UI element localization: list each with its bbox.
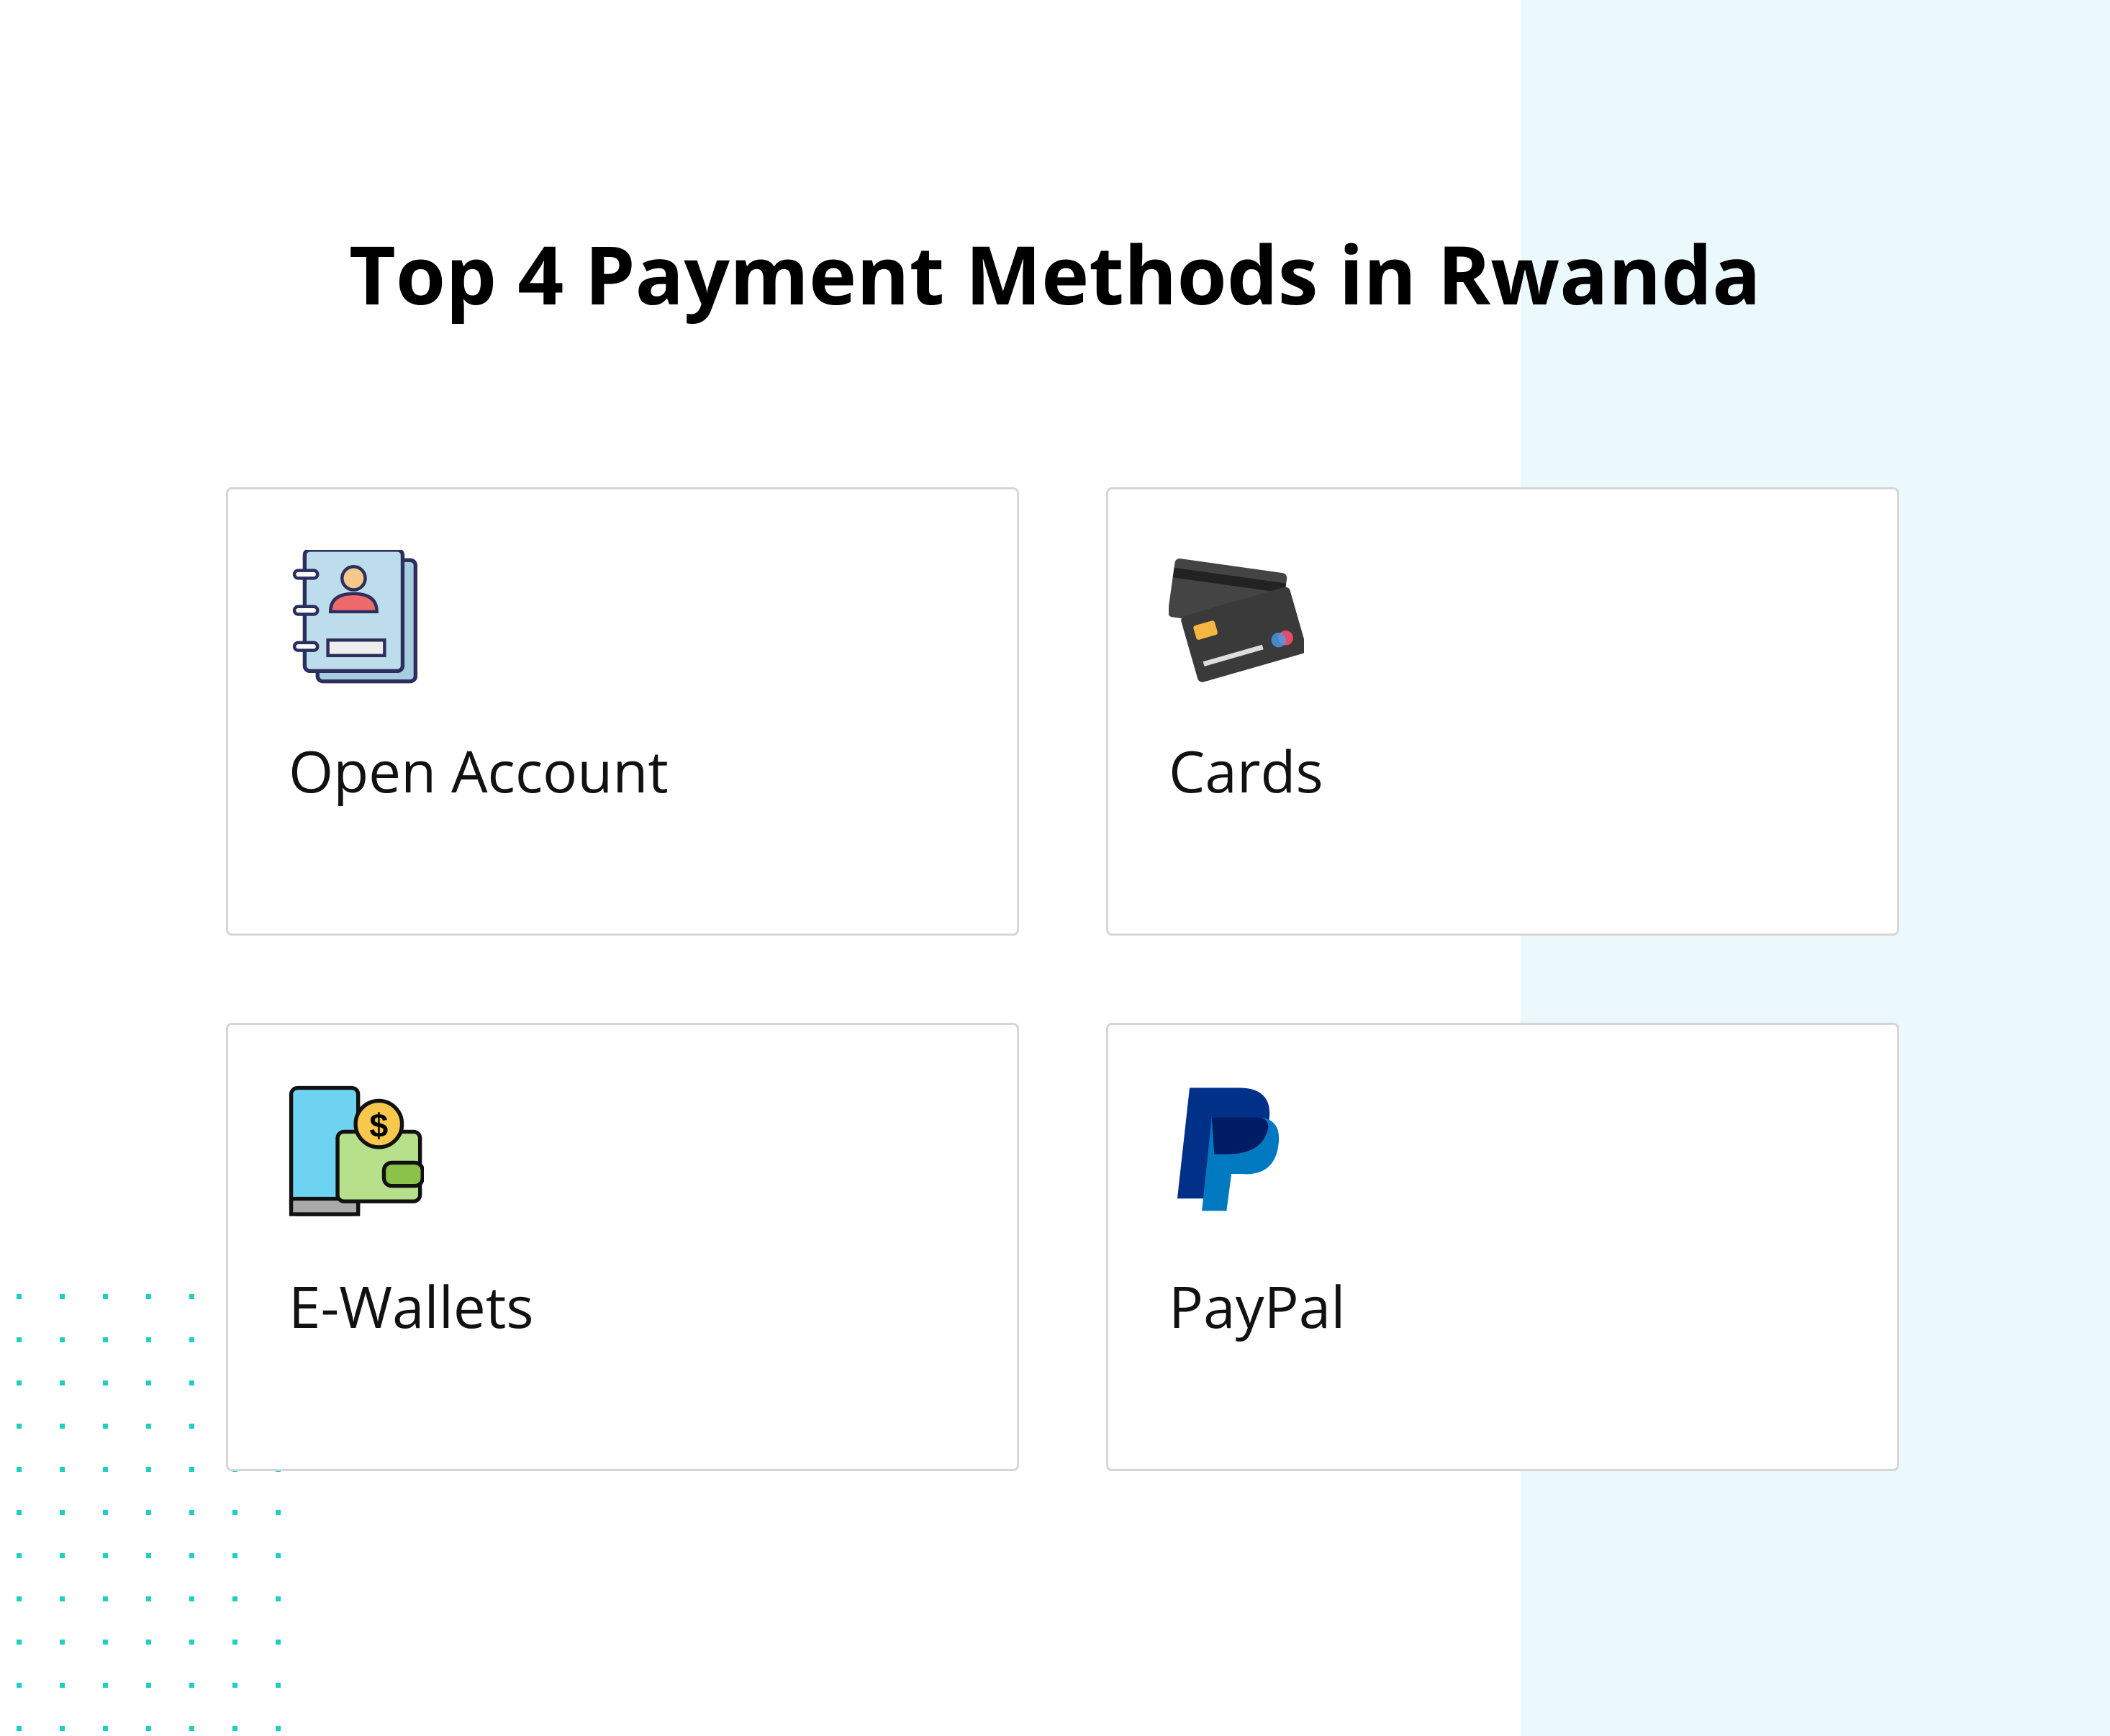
icon: phone wallet [289, 1085, 424, 1216]
icon: credit cards [1169, 559, 1304, 682]
dot pattern [17, 1294, 281, 1731]
label: PayPal [1169, 1267, 1345, 1345]
icon: paypal logo [1177, 1088, 1280, 1211]
icon: address book [292, 550, 417, 684]
panel: cards [1106, 487, 1899, 936]
panel: paypal [1106, 1023, 1899, 1471]
title: Top 4 Payment Methods in Rwanda [349, 218, 1761, 328]
panel: e-wallets [226, 1023, 1019, 1471]
label: Open Account [289, 731, 669, 810]
panel: open account [226, 487, 1019, 936]
label: E-Wallets [289, 1267, 533, 1345]
label: Cards [1169, 731, 1323, 810]
icon: phone wallet: $ [369, 1107, 388, 1144]
